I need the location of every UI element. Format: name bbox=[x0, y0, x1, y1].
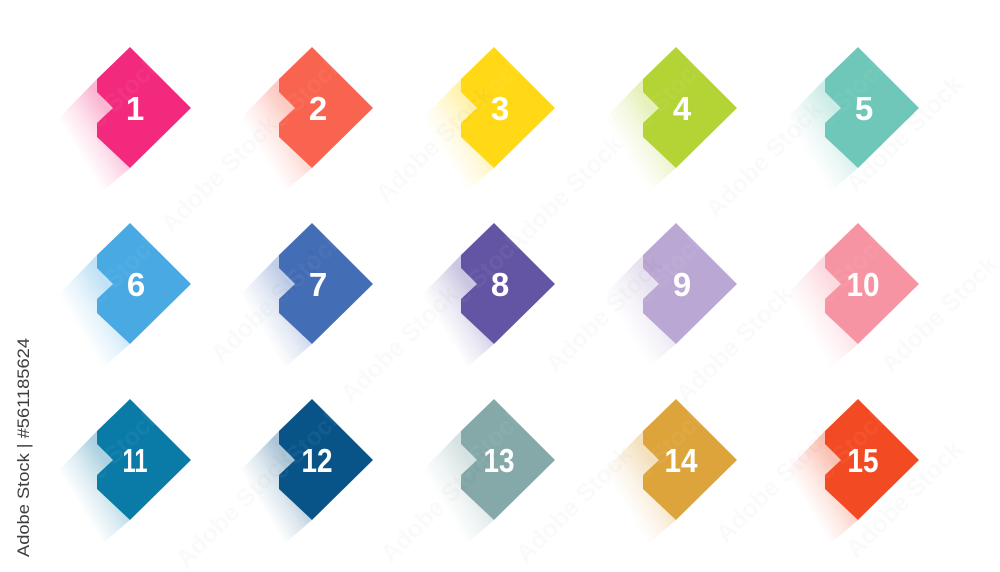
bullet 9: Adobe Stock bbox=[584, 226, 712, 354]
bullet 10: 10 bbox=[846, 266, 880, 303]
bullet 13: 13 bbox=[484, 442, 514, 479]
bullet 5: 5 bbox=[855, 90, 873, 127]
bullet 2: 2 bbox=[309, 90, 327, 127]
bullet 7: 7 bbox=[309, 266, 327, 303]
stock id side label: Adobe Stock | #561185624 bbox=[14, 338, 33, 557]
bullet 15: Adobe Stock bbox=[766, 402, 894, 530]
bullet 5: Adobe Stock bbox=[766, 50, 894, 178]
bullet 1: 1 bbox=[126, 90, 144, 127]
bullet 12: Adobe Stock bbox=[220, 402, 348, 530]
bullet 14: 14 bbox=[664, 442, 698, 479]
bullet 8: Adobe Stock bbox=[402, 226, 530, 354]
bullet 1: Adobe Stock bbox=[38, 50, 166, 178]
bullet 13: Adobe Stock bbox=[402, 402, 530, 530]
bullet 14: Adobe Stock bbox=[584, 402, 712, 530]
bullet 6: 6 bbox=[127, 266, 145, 303]
bullet 4: Adobe Stock bbox=[584, 50, 712, 178]
bullet 12: 12 bbox=[302, 442, 332, 479]
bullet 11: Adobe Stock bbox=[38, 402, 166, 530]
bullet 7: Adobe Stock bbox=[220, 226, 348, 354]
bullet 6: Adobe Stock bbox=[38, 226, 166, 354]
bullet 8: 8 bbox=[491, 266, 509, 303]
bullet 2: Adobe Stock bbox=[220, 50, 348, 178]
bullet 9: 9 bbox=[673, 266, 691, 303]
bullet 15: 15 bbox=[848, 442, 878, 479]
bullet 11: 11 bbox=[122, 442, 148, 479]
bullet 3: Adobe Stock bbox=[402, 50, 530, 178]
bullet 3: 3 bbox=[491, 90, 509, 127]
bullet 10: Adobe Stock bbox=[766, 226, 894, 354]
bullet 4: 4 bbox=[673, 90, 692, 127]
watermark text on background bbox=[155, 70, 1000, 572]
